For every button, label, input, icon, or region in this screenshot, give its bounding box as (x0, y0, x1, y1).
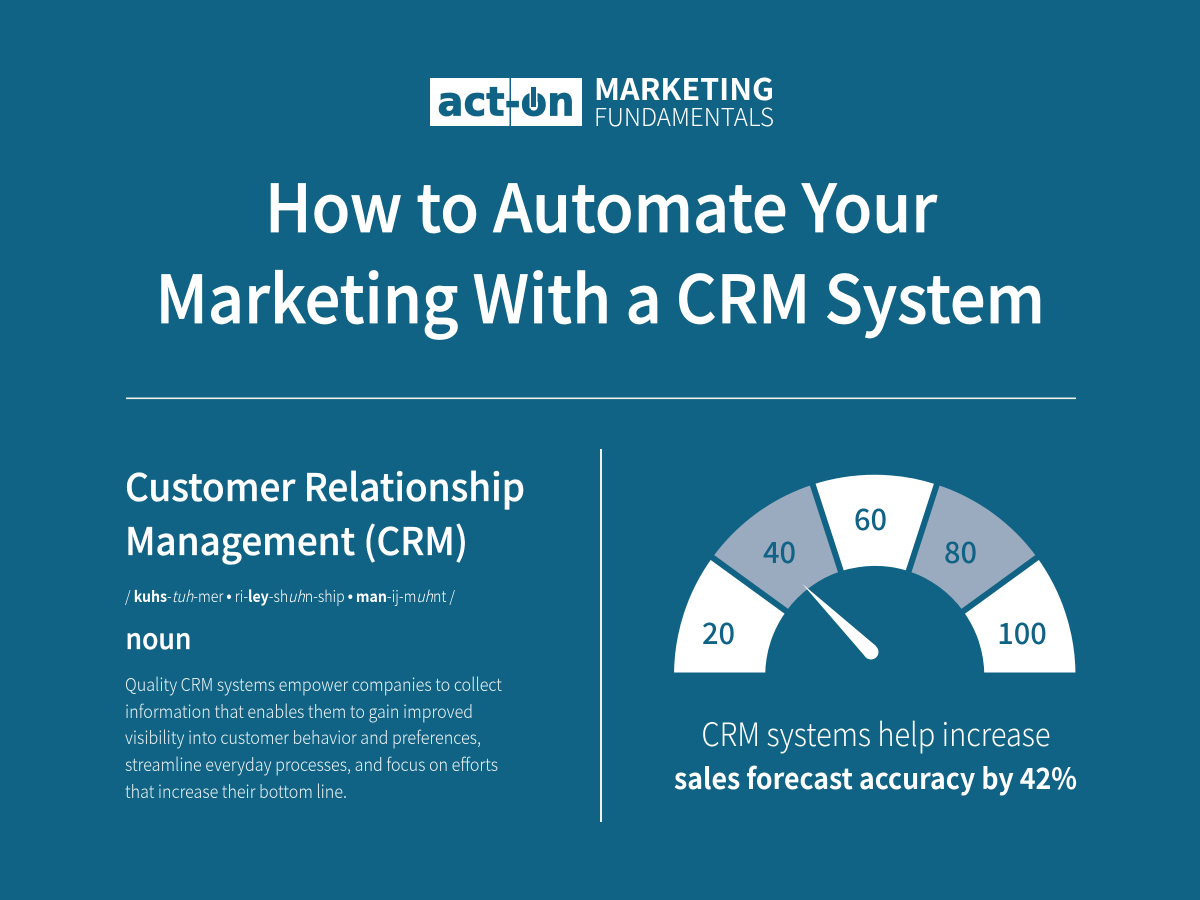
title (156, 156, 1045, 343)
gauge segment: 40 (712, 485, 841, 611)
gauge chart (660, 471, 1090, 680)
gauge segment: 20 (674, 558, 786, 676)
panel: definition (125, 457, 525, 804)
gauge segment: 60 (813, 475, 937, 571)
definition body: Quality CRM systems empower companies to collect (125, 671, 503, 697)
callout: statistic: sales forecast accuracy by 42% (674, 756, 1077, 798)
definition body (125, 671, 503, 804)
part of speech: noun (126, 618, 192, 658)
definition heading: Management (CRM) (125, 511, 468, 566)
definition body: information that enables them to gain improved (125, 698, 473, 724)
definition body: visibility into customer behavior and preferences, (125, 724, 481, 750)
title: Marketing With a CRM System (156, 247, 1045, 343)
callout: statistic: CRM systems help increase (702, 710, 1050, 756)
gauge labels: 100 (997, 611, 1047, 653)
definition body: that increase their bottom line. (125, 778, 347, 804)
gauge labels: 20 (702, 611, 735, 653)
gauge labels: 80 (944, 530, 977, 572)
logo: fundamentals wordmark: FUNDAMENTALS (594, 98, 774, 134)
definition body: streamline everyday processes, and focus on efforts (125, 751, 498, 777)
title: How to Automate Your (265, 156, 938, 252)
callout: statistic (674, 710, 1077, 798)
gauge segment: 100 (963, 558, 1076, 676)
gauge segment: 80 (909, 485, 1037, 611)
definition heading: Customer Relationship (125, 457, 525, 512)
gauge labels: 60 (854, 497, 887, 539)
gauge needle (802, 584, 878, 660)
gauge labels (702, 497, 1047, 653)
logo lockup (430, 65, 774, 134)
gauge labels: 40 (763, 530, 796, 572)
logo: act-on badge: act-on (438, 80, 574, 126)
definition heading (125, 457, 525, 566)
logo: marketing wordmark: MARKETING (594, 65, 774, 109)
pronunciation: / kuhs-tuh-mer • ri-ley-shuhn-ship • man-ij-muhnt / (125, 585, 455, 607)
